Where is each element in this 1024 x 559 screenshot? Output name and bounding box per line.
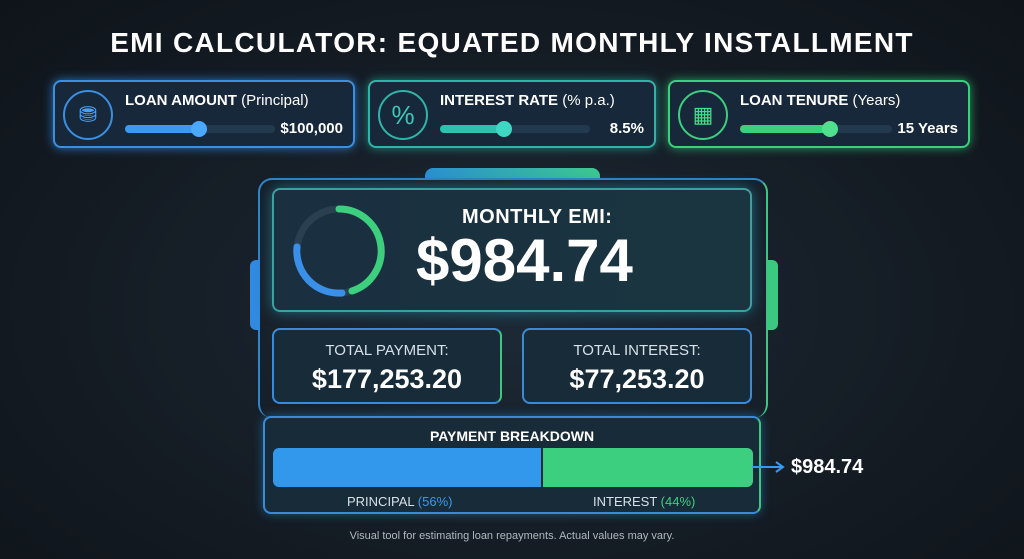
arrow	[752, 461, 785, 473]
panel: payment breakdown: INTEREST (44%)	[593, 494, 695, 509]
slider	[440, 125, 590, 133]
label: INTEREST RATE (% p.a.)	[440, 92, 615, 109]
footer note: Visual tool for estimating loan repayments. Actual values may vary.	[350, 530, 674, 542]
panel: payment breakdown	[263, 416, 761, 514]
label: LOAN TENURE (Years)	[740, 92, 900, 109]
icon: coins	[63, 90, 113, 140]
card: interest rate	[368, 80, 656, 148]
icon: calendar: ▦	[693, 102, 713, 127]
arrow value: $984.74	[791, 456, 863, 478]
value: $984.74	[416, 227, 633, 294]
icon: percent: %	[391, 100, 415, 130]
icon: coins: ⛃	[79, 102, 97, 127]
legend: PRINCIPAL (56%)	[347, 494, 452, 509]
panel: monthly EMI	[272, 188, 752, 312]
ring chart	[293, 206, 385, 297]
bar chart	[273, 448, 753, 487]
main frame	[250, 168, 778, 418]
value: $100,000	[280, 120, 343, 137]
panel: payment breakdown: PAYMENT BREAKDOWN	[430, 428, 594, 444]
panel: total interest: TOTAL INTEREST:	[573, 342, 701, 359]
card: loan tenure	[668, 80, 970, 148]
icon: calendar	[678, 90, 728, 140]
value: 8.5%	[610, 120, 644, 137]
heading: MONTHLY EMI:	[462, 206, 612, 228]
panel: total interest: $77,253.20	[569, 364, 705, 394]
panel: total payment: $177,253.20	[312, 364, 462, 394]
slider	[740, 125, 892, 133]
card: loan amount	[53, 80, 355, 148]
panel: total interest	[522, 328, 752, 404]
value: 15 Years	[897, 120, 958, 137]
slider	[125, 125, 275, 133]
icon: percent	[378, 90, 428, 140]
panel: total payment: TOTAL PAYMENT:	[325, 342, 449, 359]
panel: total payment	[272, 328, 502, 404]
title: EMI CALCULATOR: EQUATED MONTHLY INSTALLMENT	[110, 27, 914, 58]
label: LOAN AMOUNT (Principal)	[125, 92, 309, 109]
